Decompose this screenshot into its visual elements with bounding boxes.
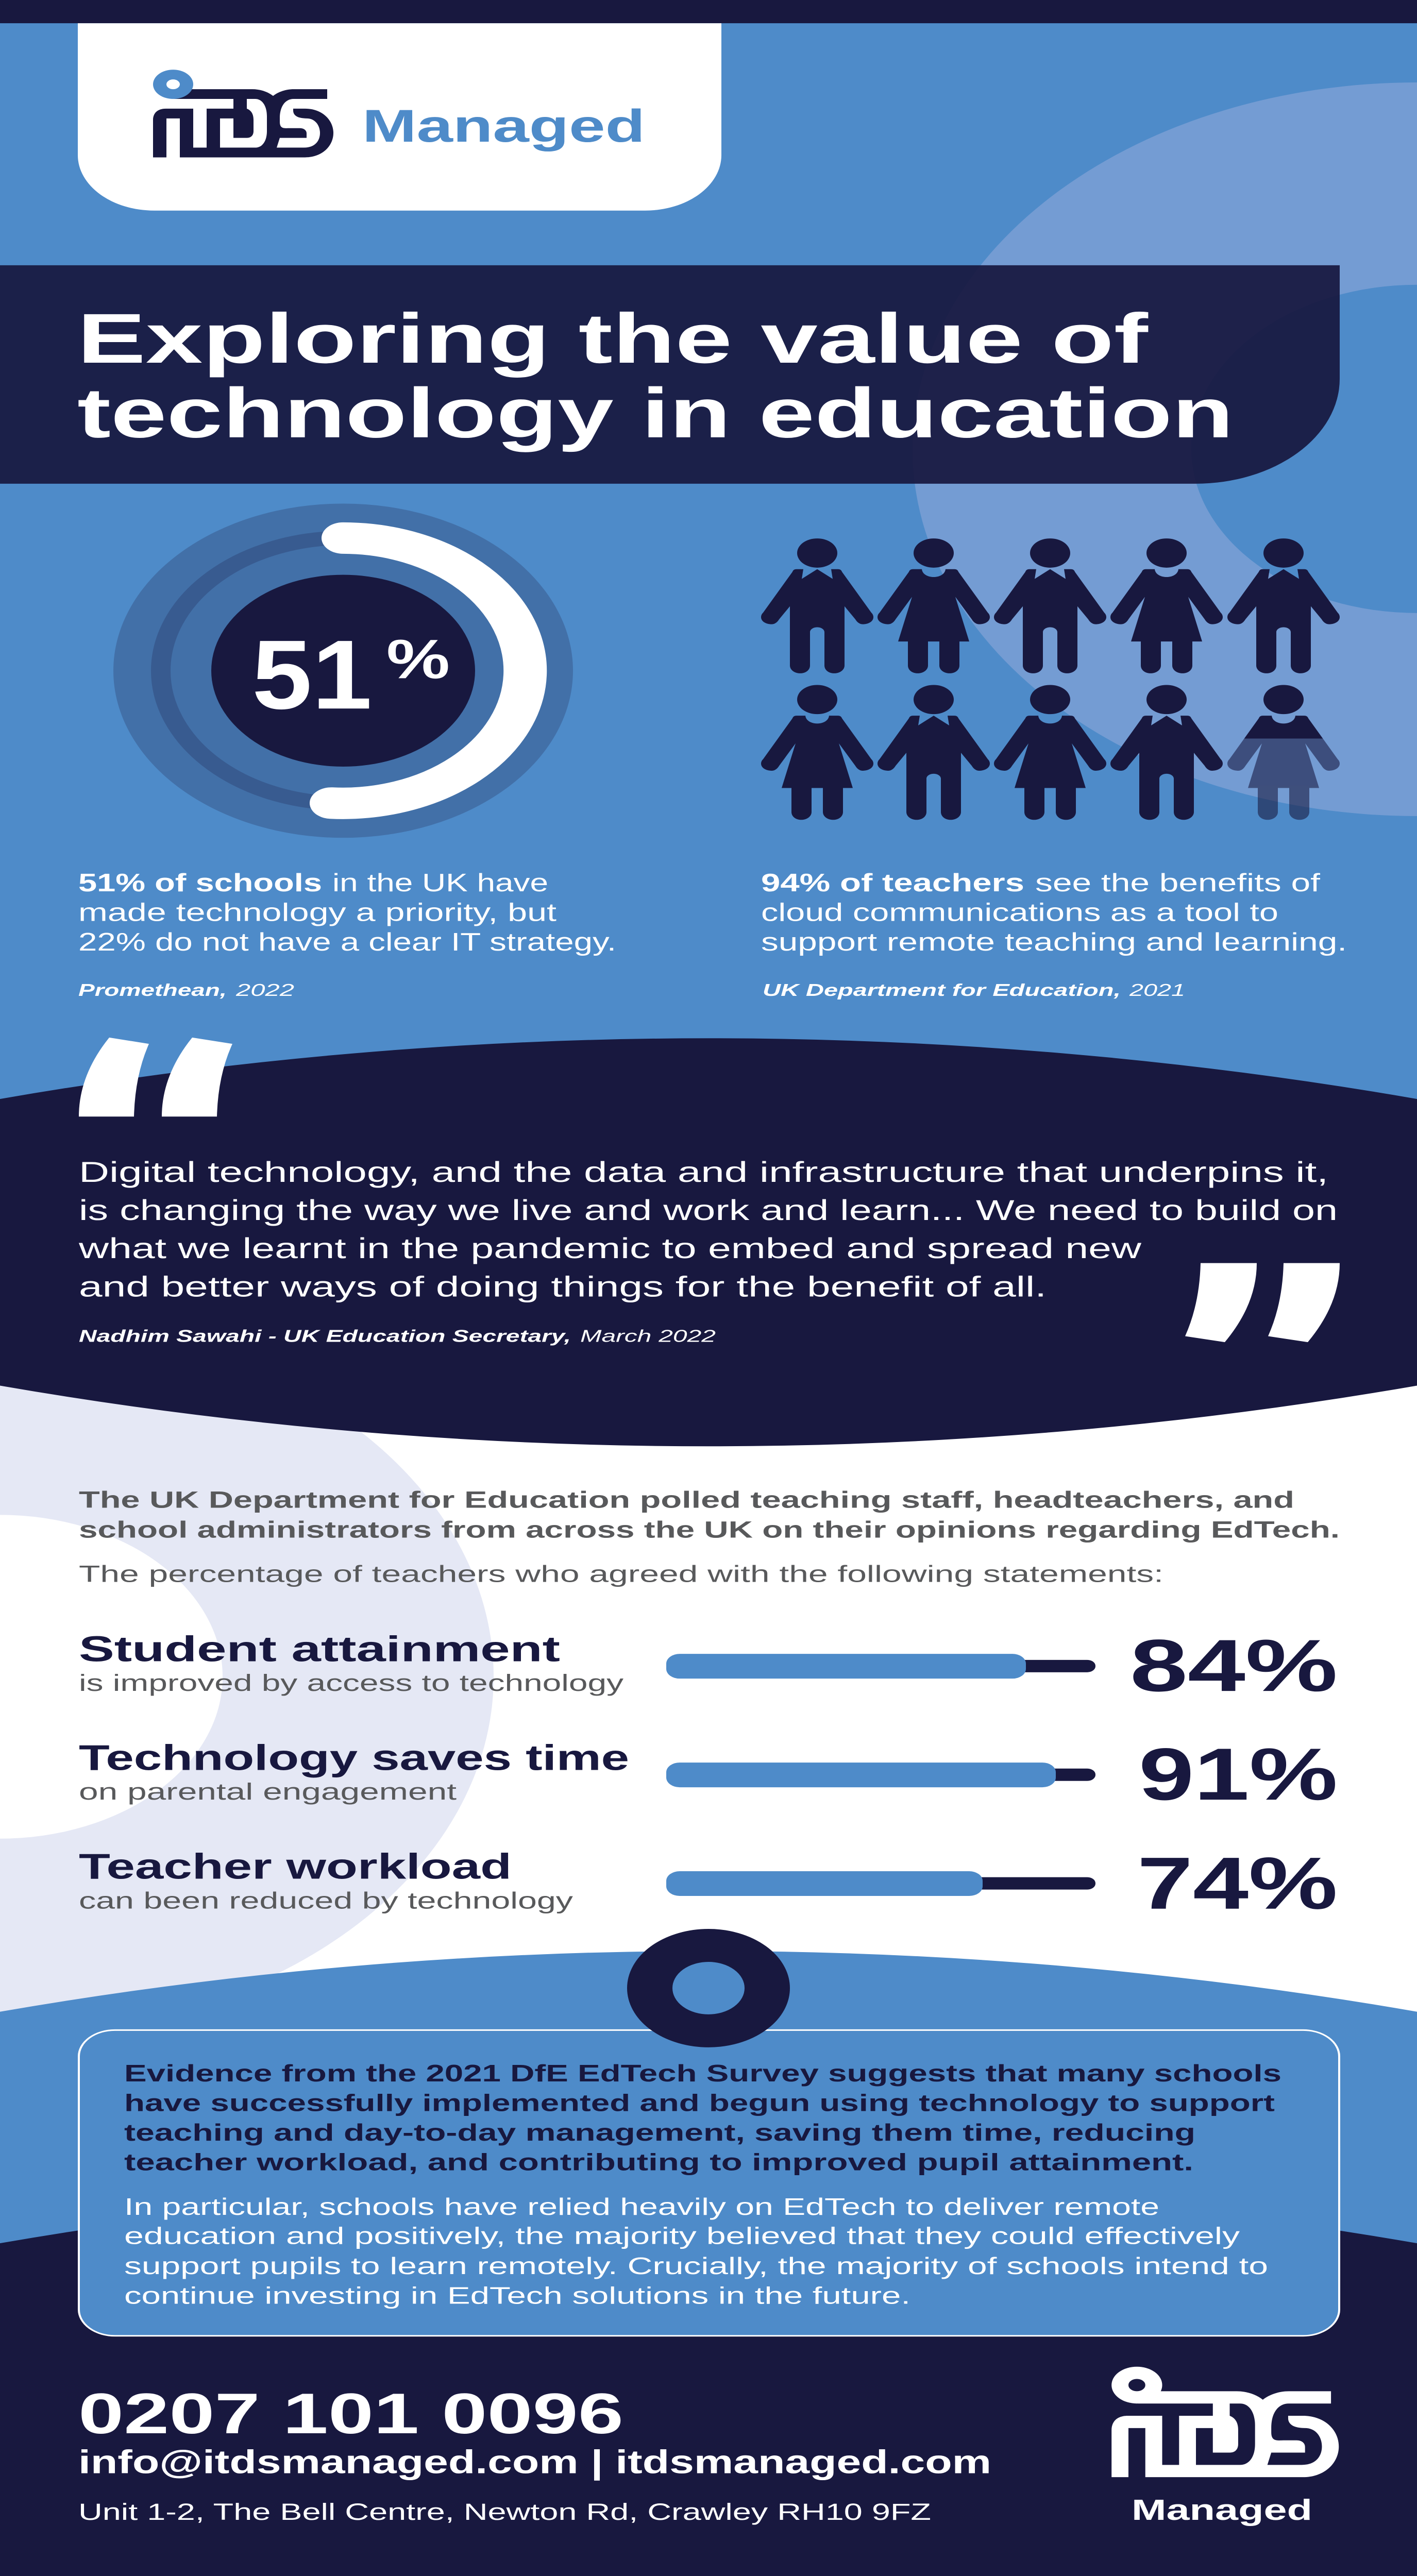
callout regular text: continue investing in EdTech solutions in the future. bbox=[124, 2282, 910, 2309]
text block: 51% of schools: in the UK have bbox=[332, 868, 548, 897]
quote attribution: Nadhim Sawahi - UK Education Secretary, bbox=[79, 1326, 571, 1346]
background: lower blue arc bbox=[0, 1951, 1417, 2576]
stat row: technology saves time: on parental engagement bbox=[79, 1779, 457, 1805]
title: Exploring the value of bbox=[77, 299, 1149, 378]
title bbox=[77, 299, 1234, 452]
footer contact details: Unit 1-2, The Bell Centre, Newton Rd, Crawley RH10 9FZ bbox=[78, 2498, 931, 2525]
callout regular text: In particular, schools have relied heavily on EdTech to deliver remote bbox=[124, 2193, 1159, 2220]
quote text: Digital technology, and the data and infrastructure that underpins it, bbox=[79, 1157, 1328, 1188]
stat row: technology saves time: 91% bbox=[1139, 1733, 1338, 1816]
source: Promethean: 2022 bbox=[235, 980, 294, 1000]
survey intro text: school administrators from across the UK on their opinions regarding EdTech. bbox=[79, 1517, 1340, 1543]
icon: navy ring on callout bbox=[650, 1945, 767, 2031]
survey intro text bbox=[79, 1487, 1340, 1587]
text block: 94% of teachers: see the benefits of bbox=[1035, 868, 1321, 897]
stat row: student attainment: Student attainment bbox=[79, 1629, 560, 1669]
panel: quote lens bbox=[0, 1038, 1417, 1446]
survey intro text: The percentage of teachers who agreed with the following statements: bbox=[79, 1562, 1163, 1587]
icon: ITDS logo mark white bbox=[1111, 2373, 1339, 2477]
decorative circle: lavender ring left bbox=[0, 1318, 494, 2036]
top bar bbox=[0, 0, 1417, 23]
stat row: teacher workload: 74% bbox=[1137, 1842, 1338, 1925]
footer logo wordmark: Managed bbox=[1132, 2494, 1312, 2526]
text block: 51% of schools: made technology a priority, but bbox=[78, 898, 557, 926]
text block: 51% of schools: 51% of schools bbox=[78, 868, 322, 897]
logo wordmark: Managed bbox=[362, 100, 645, 151]
callout bold text: teaching and day-to-day management, saving them time, reducing bbox=[124, 2119, 1195, 2146]
quote text: and better ways of doing things for the benefit of all. bbox=[79, 1271, 1047, 1303]
source: Promethean: Promethean, bbox=[78, 980, 227, 1000]
text block: 94% of teachers: cloud communications as a tool to bbox=[761, 898, 1278, 926]
quote text bbox=[78, 1157, 1338, 1303]
source: Promethean bbox=[78, 980, 294, 1000]
chart: 51% donut: % bbox=[386, 629, 450, 690]
quote text: what we learnt in the pandemic to embed and spread new bbox=[78, 1233, 1142, 1265]
icon: closing quote mark bbox=[1185, 1263, 1340, 1342]
quote text: is changing the way we live and work and learn... We need to build on bbox=[79, 1195, 1338, 1226]
callout regular text: support pupils to learn remotely. Crucially, the majority of schools intend to bbox=[124, 2252, 1268, 2279]
text block: 51% of schools bbox=[78, 868, 616, 1000]
decorative circle: pale ring top right bbox=[913, 82, 1417, 816]
footer logo bbox=[1111, 2373, 1339, 2526]
text block: 94% of teachers: support remote teaching and learning. bbox=[761, 927, 1347, 956]
source: UK Department for Education: 2021 bbox=[1129, 980, 1185, 1000]
icon: ITDS logo mark bbox=[153, 75, 333, 157]
text block: 51% of schools: 22% do not have a clear IT strategy. bbox=[78, 927, 616, 956]
stat row: teacher workload bbox=[79, 1842, 1338, 1925]
stat row: teacher workload: can been reduced by technology bbox=[79, 1888, 573, 1914]
stat row: student attainment: 84% bbox=[1130, 1624, 1338, 1707]
callout regular text bbox=[124, 2193, 1268, 2309]
stat row: technology saves time: Technology saves time bbox=[79, 1737, 629, 1778]
background: footer navy arc bbox=[0, 2182, 1417, 2576]
panel: header logo bbox=[78, 23, 721, 211]
callout bold text: have successfully implemented and begun using technology to support bbox=[124, 2089, 1275, 2116]
callout bold text: teacher workload, and contributing to improved pupil attainment. bbox=[124, 2148, 1193, 2175]
footer contact details: info@itdsmanaged.com | itdsmanaged.com bbox=[78, 2444, 991, 2481]
title: technology in education bbox=[77, 374, 1234, 452]
footer contact details: 0207 101 0096 bbox=[78, 2382, 623, 2446]
panel: title band bbox=[0, 265, 1340, 484]
stat row: technology saves time bbox=[79, 1733, 1338, 1816]
chart: 51% donut bbox=[113, 503, 573, 838]
callout regular text: education and positively, the majority believed that they could effectively bbox=[124, 2222, 1240, 2249]
source: UK Department for Education: UK Department for Education, bbox=[763, 980, 1121, 1000]
stat row: teacher workload: Teacher workload bbox=[79, 1846, 512, 1887]
chart: 51% donut: 51 bbox=[252, 620, 372, 730]
quote attribution: March 2022 bbox=[580, 1326, 716, 1346]
text block: 94% of teachers bbox=[761, 868, 1347, 1000]
text block: 94% of teachers: 94% of teachers bbox=[761, 868, 1024, 897]
background: white survey section bbox=[0, 1236, 1417, 2098]
background: blue header section bbox=[0, 0, 1417, 1236]
callout bold text: Evidence from the 2021 DfE EdTech Survey suggests that many schools bbox=[124, 2060, 1281, 2087]
panel: evidence callout bbox=[79, 2030, 1339, 2336]
chart: pictogram of ten people, 94% filled bbox=[761, 538, 1340, 820]
stat row: student attainment bbox=[79, 1624, 1338, 1707]
icon: opening quote mark bbox=[79, 1038, 232, 1116]
stat row: student attainment: is improved by access to technology bbox=[79, 1670, 623, 1696]
survey intro text: The UK Department for Education polled teaching staff, headteachers, and bbox=[79, 1487, 1294, 1513]
callout bold text bbox=[124, 2060, 1281, 2175]
footer contact details bbox=[78, 2382, 991, 2525]
